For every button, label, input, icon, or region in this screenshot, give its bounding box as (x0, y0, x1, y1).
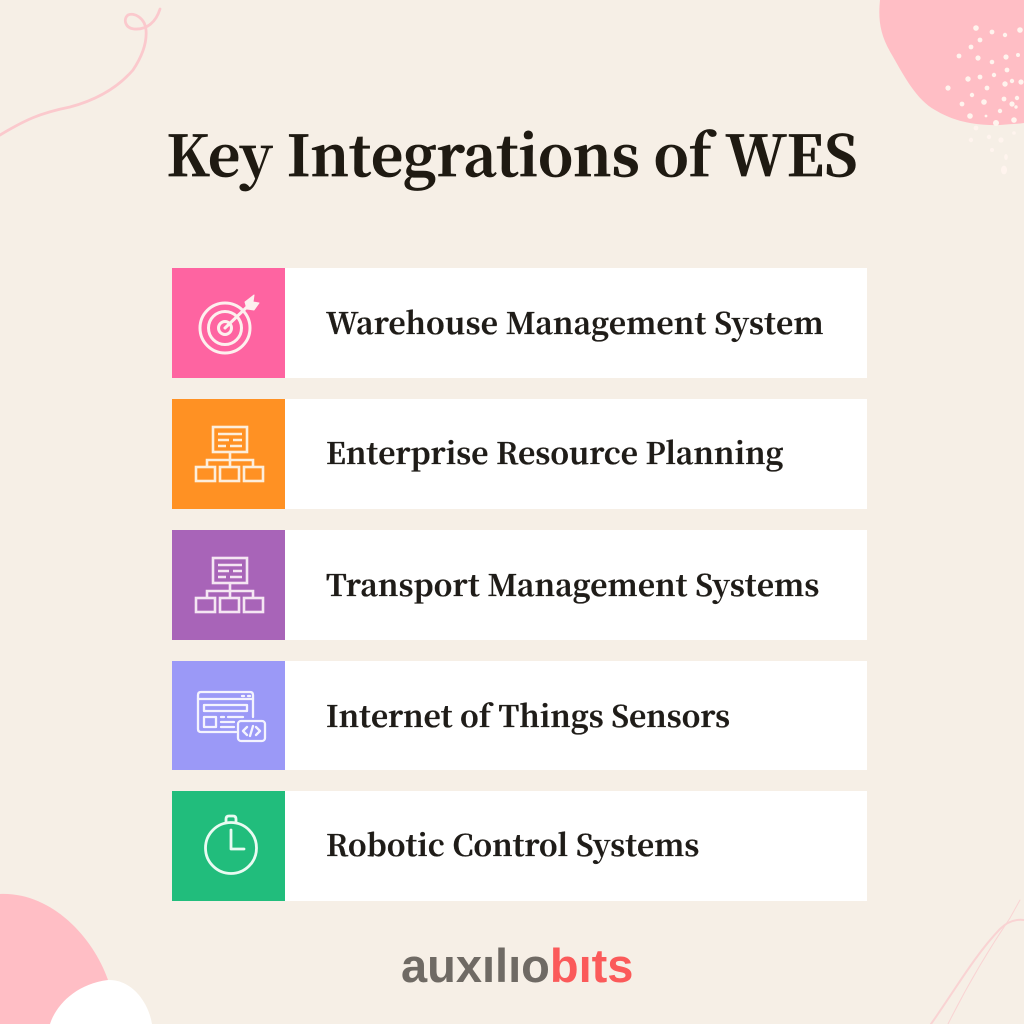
row: Robotic Control Systems: Robotic Control Systems (326, 822, 699, 865)
icon: hierarchy diagram (172, 399, 285, 509)
row: Robotic Control Systems (172, 791, 867, 901)
top-left curl line (0, 9, 160, 135)
row: Internet of Things Sensors: Internet of Things Sensors (326, 693, 730, 736)
icon: browser window with code (172, 661, 285, 770)
top-right pink blob (879, 0, 1024, 125)
row: Transport Management Systems: Transport Management Systems (326, 562, 820, 605)
bottom-left white blob (50, 980, 152, 1024)
row: Enterprise Resource Planning: Enterprise Resource Planning (326, 430, 784, 473)
icon: stopwatch (172, 791, 285, 901)
icon: hierarchy diagram (172, 530, 285, 640)
row: Enterprise Resource Planning (172, 399, 867, 509)
row: Warehouse Management System: Warehouse Management System (326, 300, 824, 343)
row: Transport Management Systems (172, 530, 867, 640)
row: Warehouse Management System (172, 268, 867, 378)
bottom-right lines (931, 900, 1024, 1024)
row: Internet of Things Sensors (172, 661, 867, 770)
dot cluster (945, 25, 1024, 174)
icon: target with arrow (172, 268, 285, 378)
title: Key Integrations of WES (166, 112, 858, 193)
logo: auxiliobits: auxılıobıts (401, 939, 633, 992)
bottom-left pink blob (0, 894, 120, 1024)
